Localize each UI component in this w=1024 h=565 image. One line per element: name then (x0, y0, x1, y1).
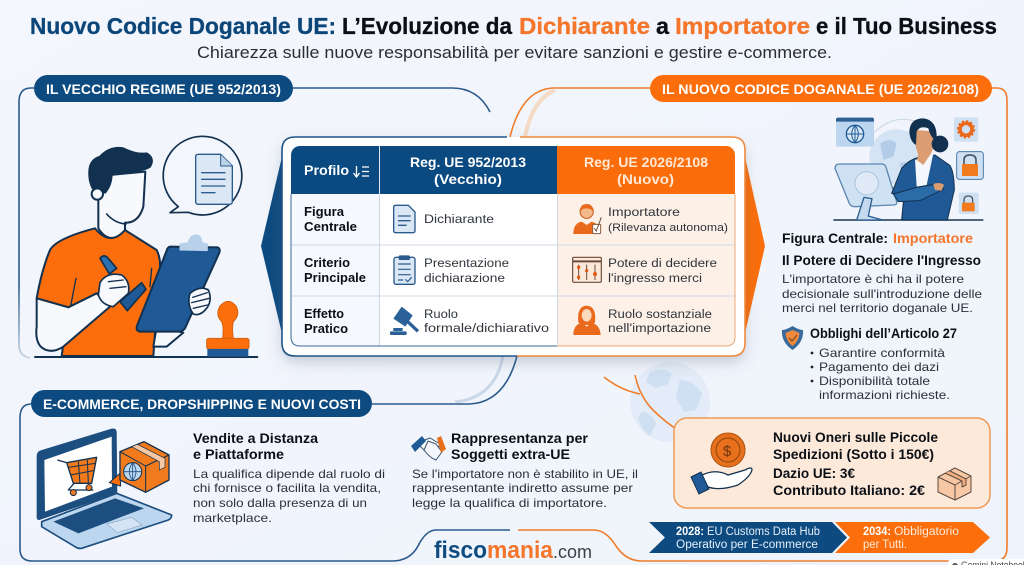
text block: figura centrale: merci nel territorio doganale UE. (782, 301, 973, 315)
pill: new code (650, 75, 992, 102)
text block: article 27 obligations: Garantire conformità (819, 346, 945, 360)
pill: new code: IL NUOVO CODICE DOGANALE (UE 2026/2108) (662, 81, 979, 97)
text block: distance sales: non solo dalla presenza di un (193, 496, 367, 510)
title: a (656, 13, 670, 39)
text: charges: Contributo Italiano: 2€ (773, 483, 926, 498)
row: criterio principale: Potere di decidere (608, 256, 717, 270)
icon: parcel (938, 468, 971, 500)
text block: representation: Se l'importatore non è stabilito in UE, il (412, 467, 638, 481)
timeline: 2034: 2034: (863, 526, 891, 538)
row: effetto pratico: Effetto (304, 306, 344, 321)
icon: coin and hand (691, 433, 752, 494)
text: charges: Dazio UE: 3€ (773, 466, 855, 481)
text block: distance sales: Vendite a Distanza (193, 431, 319, 446)
row: figura centrale: Importatore (608, 205, 680, 219)
table header: new regulation: Reg. UE 2026/2108 (584, 154, 708, 170)
timeline: 2034: per Tutti. (863, 539, 907, 551)
text block: figura centrale: Il Potere di Decidere l'Ingresso (782, 253, 981, 268)
row: effetto pratico (304, 306, 712, 336)
icon: coin and hand: $ (723, 443, 732, 460)
illustration: businesswoman with digital interface (833, 117, 983, 220)
icon: handshake (411, 436, 446, 460)
title (30, 13, 997, 39)
text block: representation: Soggetti extra-UE (451, 447, 570, 462)
logo: fiscomania (434, 537, 592, 564)
timeline: 2028: EU Customs Data Hub (707, 526, 820, 538)
text block: article 27 obligations: Pagamento dei dazi (819, 360, 939, 374)
timeline: 2034 (835, 522, 990, 553)
table header: old regulation: Reg. UE 952/2013 (410, 154, 526, 170)
timeline: 2028 (649, 522, 847, 553)
text block: article 27 obligations (810, 326, 957, 402)
text: charges (773, 430, 938, 498)
text block: distance sales: marketplace. (193, 511, 272, 525)
row: criterio principale: Presentazione (424, 256, 509, 270)
table icons (390, 204, 601, 335)
text block: figura centrale: Figura Centrale: (782, 231, 888, 246)
illustration: laptop with cart and parcel (37, 428, 172, 548)
text block: figura centrale: L'importatore è chi ha il potere (782, 272, 964, 286)
text block: article 27 obligations: Disponibilità totale (819, 374, 930, 388)
text block: distance sales: La qualifica dipende dal ruolo di (193, 467, 385, 481)
table header: new regulation: (Nuovo) (617, 171, 674, 187)
title: e il Tuo Business (816, 13, 997, 39)
subtitle: Chiarezza sulle nuove responsabilità per evitare sanzioni e gestire e-commerce. (197, 44, 832, 62)
row: figura centrale: Centrale (304, 219, 357, 234)
pill: old regime: IL VECCHIO REGIME (UE 952/2013) (46, 81, 281, 97)
text block: representation (412, 431, 638, 510)
text block: figura centrale (782, 231, 982, 315)
text block: representation: Rappresentanza per (451, 431, 589, 446)
timeline: 2028: Operativo per E-commerce (676, 539, 818, 551)
row: criterio principale: Criterio (304, 255, 350, 270)
icon: shield (782, 326, 803, 350)
text block: figura centrale: Importatore (893, 231, 974, 246)
title: Nuovo Codice Doganale UE: (30, 13, 336, 39)
pill: e-commerce (31, 390, 372, 417)
row: figura centrale (304, 204, 728, 234)
text block: article 27 obligations: Obblighi dell’Articolo 27 (810, 326, 957, 341)
title: Importatore (675, 13, 810, 39)
panel: small shipment charges (674, 418, 990, 508)
table header: new regulation (584, 154, 708, 187)
decorative globe (630, 362, 710, 442)
text block: distance sales: e Piattaforme (193, 447, 285, 462)
table header: profilo: Profilo (304, 163, 349, 178)
row: effetto pratico: formale/dichiarativo (424, 321, 549, 335)
watermark: gemini notebook (948, 559, 1024, 565)
text: charges: Spedizioni (Sotto i 150€) (773, 447, 934, 462)
pill: old regime (34, 75, 293, 102)
row: criterio principale: dichiarazione (424, 271, 505, 285)
panel: new code outline (510, 88, 1007, 561)
timeline: 2028: 2028: (676, 526, 704, 538)
text block: distance sales (193, 431, 385, 525)
row: criterio principale (304, 255, 717, 285)
row: effetto pratico: Ruolo (424, 307, 458, 321)
text block: distance sales: chi fornisce o facilita la vendita, (193, 481, 381, 495)
panel: comparison table (282, 137, 745, 356)
panel: e-commerce outline (20, 356, 517, 561)
pill: e-commerce: E-COMMERCE, DROPSHIPPING E NUOVI COSTI (43, 396, 361, 412)
text block: representation: legge la qualifica di importatore. (412, 496, 607, 510)
table header: profilo (304, 163, 369, 178)
illustration: man with clipboard and stamp (35, 136, 257, 357)
table header: old regulation (410, 154, 526, 187)
row: effetto pratico: nell'importazione (608, 321, 711, 335)
text block: article 27 obligations: informazioni richieste. (819, 388, 950, 402)
table arrows (261, 148, 765, 342)
row: figura centrale: Dichiarante (424, 212, 494, 226)
row: effetto pratico: Ruolo sostanziale (608, 307, 712, 321)
title: L’Evoluzione da (342, 13, 513, 39)
text block: representation: rappresentante indiretto assume per (412, 481, 633, 495)
logo: fiscomania: fisco (434, 537, 487, 564)
logo: fiscomania: .com (553, 542, 592, 562)
panel: old regime outline (19, 88, 490, 358)
title: Dichiarante (519, 13, 650, 39)
row: figura centrale: (Rilevanza autonoma) (608, 222, 728, 234)
row: figura centrale: Figura (304, 204, 345, 219)
row: criterio principale: Principale (304, 270, 366, 285)
timeline: 2034: Obbligatorio (894, 526, 959, 538)
logo: fiscomania: mania (487, 537, 554, 564)
row: criterio principale: l'ingresso merci (608, 271, 702, 285)
text block: figura centrale: decisionale sull'introduzione delle (782, 287, 982, 301)
table header: old regulation: (Vecchio) (434, 171, 502, 187)
row: effetto pratico: Pratico (304, 321, 348, 336)
text: charges: Nuovi Oneri sulle Piccole (773, 430, 938, 445)
